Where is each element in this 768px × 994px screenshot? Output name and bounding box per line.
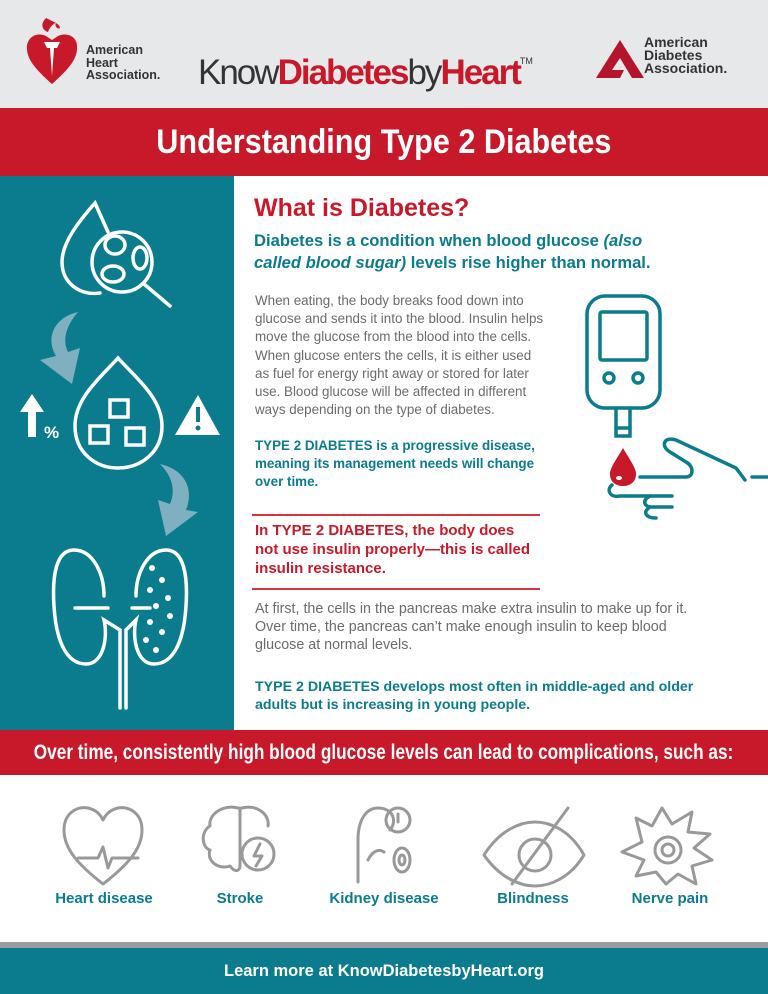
type 2 age text — [255, 679, 694, 713]
footer — [0, 948, 768, 994]
logo: American Diabetes Association — [596, 34, 727, 78]
icon: warning triangle — [175, 395, 220, 435]
body text 1: When eating, the body breaks food down into — [255, 293, 524, 308]
logo: American Heart Association — [26, 18, 160, 84]
left teal panel with icons — [0, 176, 234, 730]
type 2 progressive text: over time. — [255, 474, 318, 489]
title band: Understanding Type 2 Diabetes — [156, 123, 612, 161]
logo: American Heart Association: Association. — [86, 68, 160, 82]
icon: brain — [203, 807, 274, 871]
body text 1: use. Blood glucose will be affected in different — [255, 384, 526, 399]
type 2 age text: TYPE 2 DIABETES develops most often in middle-aged and older — [255, 679, 693, 695]
body text 2: At first, the cells in the pancreas make extra insulin to make up for it. — [255, 601, 687, 617]
body text 1: as fuel for energy right away or stored for later — [255, 366, 529, 381]
callout: insulin resistance: In TYPE 2 DIABETES, the body does — [255, 522, 514, 539]
body text 1 — [255, 293, 543, 417]
body text 1: glucose and sends it into the blood. Insulin helps — [255, 311, 543, 326]
icon: up arrow percent — [20, 394, 59, 442]
logo: Know Diabetes by Heart: KnowDiabetesbyHeartTM — [198, 53, 533, 92]
icon: up arrow percent: % — [44, 423, 59, 442]
callout: insulin resistance: insulin resistance. — [255, 560, 386, 577]
icon: blindness — [484, 808, 584, 886]
icon: drop with sugar cubes — [75, 358, 162, 468]
icon: glucose meter with hand — [585, 294, 768, 520]
icon: kidney disease — [358, 808, 410, 882]
body text 2: Over time, the pancreas can’t make enough insulin to keep blood — [255, 619, 667, 635]
logo: American Heart Association: American — [86, 43, 143, 57]
subtitle: called blood sugar) levels rise higher than normal. — [254, 253, 651, 272]
label: Nerve pain: Nerve pain — [632, 890, 708, 907]
label: Stroke: Stroke — [217, 890, 263, 907]
icon: nerve pain — [622, 808, 712, 884]
footer: Learn more at KnowDiabetesbyHeart.org — [224, 962, 544, 980]
subtitle: Diabetes is a condition when blood glucose (also — [254, 231, 642, 250]
subtitle — [254, 231, 651, 272]
label: Heart disease: Heart disease — [55, 890, 153, 907]
type 2 progressive text — [255, 438, 535, 489]
body text 1: When glucose enters the cells, it is either used — [255, 348, 531, 363]
type 2 age text: adults but is increasing in young people. — [255, 697, 530, 713]
callout: insulin resistance: not use insulin properly—this is called — [255, 541, 530, 558]
logo: American Diabetes Association: Association. — [644, 60, 727, 76]
arrow: curved down 1 — [40, 312, 80, 384]
body text 1: move the glucose from the blood into the cells. — [255, 329, 531, 344]
complications band — [0, 730, 768, 775]
arrow: curved down 2 — [158, 464, 198, 536]
label: Blindness: Blindness — [497, 890, 569, 907]
heading: What is Diabetes?: What is Diabetes? — [254, 194, 469, 222]
type 2 progressive text: TYPE 2 DIABETES is a progressive disease, — [255, 438, 535, 453]
gray divider — [0, 942, 768, 948]
logo: American Diabetes Association: Diabetes — [644, 47, 702, 63]
logo: American Heart Association: Heart — [86, 56, 118, 70]
complication icons — [62, 806, 714, 888]
body text 1: ways depending on the type of diabetes. — [255, 402, 495, 417]
icon: blood drop with magnifier — [62, 203, 170, 306]
body text 2 — [255, 601, 687, 653]
label: Kidney disease: Kidney disease — [329, 890, 439, 907]
callout: insulin resistance — [252, 514, 540, 590]
complications band: Over time, consistently high blood glucose levels can lead to complications, such as: — [34, 741, 734, 764]
icon: kidneys — [54, 550, 186, 708]
title band — [0, 108, 768, 176]
icon: heart — [64, 808, 142, 884]
header band — [0, 0, 768, 108]
type 2 progressive text: meaning its management needs will change — [255, 456, 534, 471]
logo: American Diabetes Association: American — [644, 34, 708, 50]
body text 2: glucose at normal levels. — [255, 637, 412, 653]
